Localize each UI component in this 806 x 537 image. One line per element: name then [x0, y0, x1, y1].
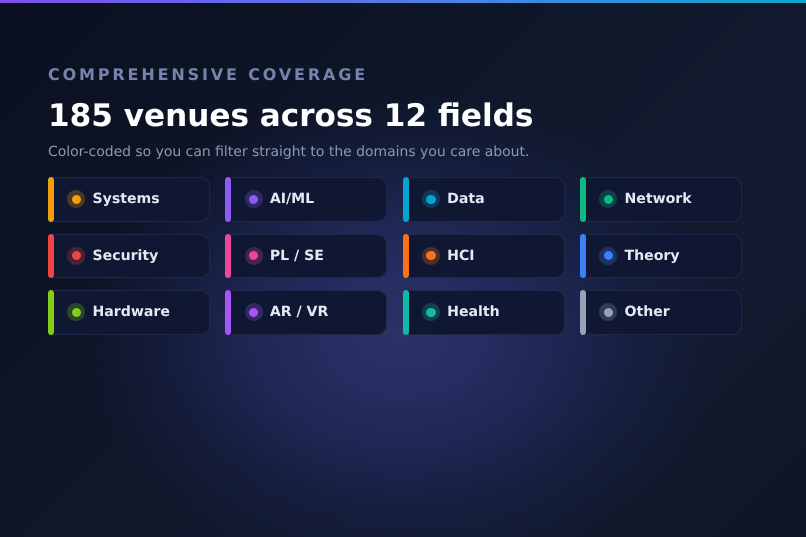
eyebrow heading: COMPREHENSIVE COVERAGE [48, 65, 368, 84]
card: Network: Network [624, 191, 692, 207]
card: Health [403, 290, 565, 335]
card: Systems [48, 177, 210, 222]
card: AR / VR: AR / VR [270, 304, 328, 320]
card: Security [48, 234, 210, 278]
card: HCI: HCI [447, 248, 475, 264]
card: AR / VR [225, 290, 387, 335]
subtitle: Color-coded so you can filter straight to the domains you care about. [48, 144, 529, 160]
card: Other [580, 290, 742, 335]
card: AI/ML [225, 177, 386, 222]
card: Systems: Systems [92, 191, 160, 207]
card: PL / SE: PL / SE [270, 248, 324, 264]
card: Other: Other [624, 304, 670, 320]
card: Hardware [48, 290, 209, 335]
card: Network [580, 177, 742, 222]
card: PL / SE [225, 234, 387, 278]
card: Theory [580, 234, 742, 278]
card: Theory: Theory [624, 248, 680, 264]
top gradient bar [0, 0, 806, 3]
card: Security: Security [92, 248, 158, 264]
title: 185 venues across 12 fields [48, 98, 533, 134]
card: AI/ML: AI/ML [270, 191, 314, 207]
card: Health: Health [447, 304, 500, 320]
card: Data [403, 177, 565, 222]
card: Data: Data [447, 191, 485, 207]
card: HCI [403, 234, 564, 278]
card: Hardware: Hardware [92, 304, 170, 320]
